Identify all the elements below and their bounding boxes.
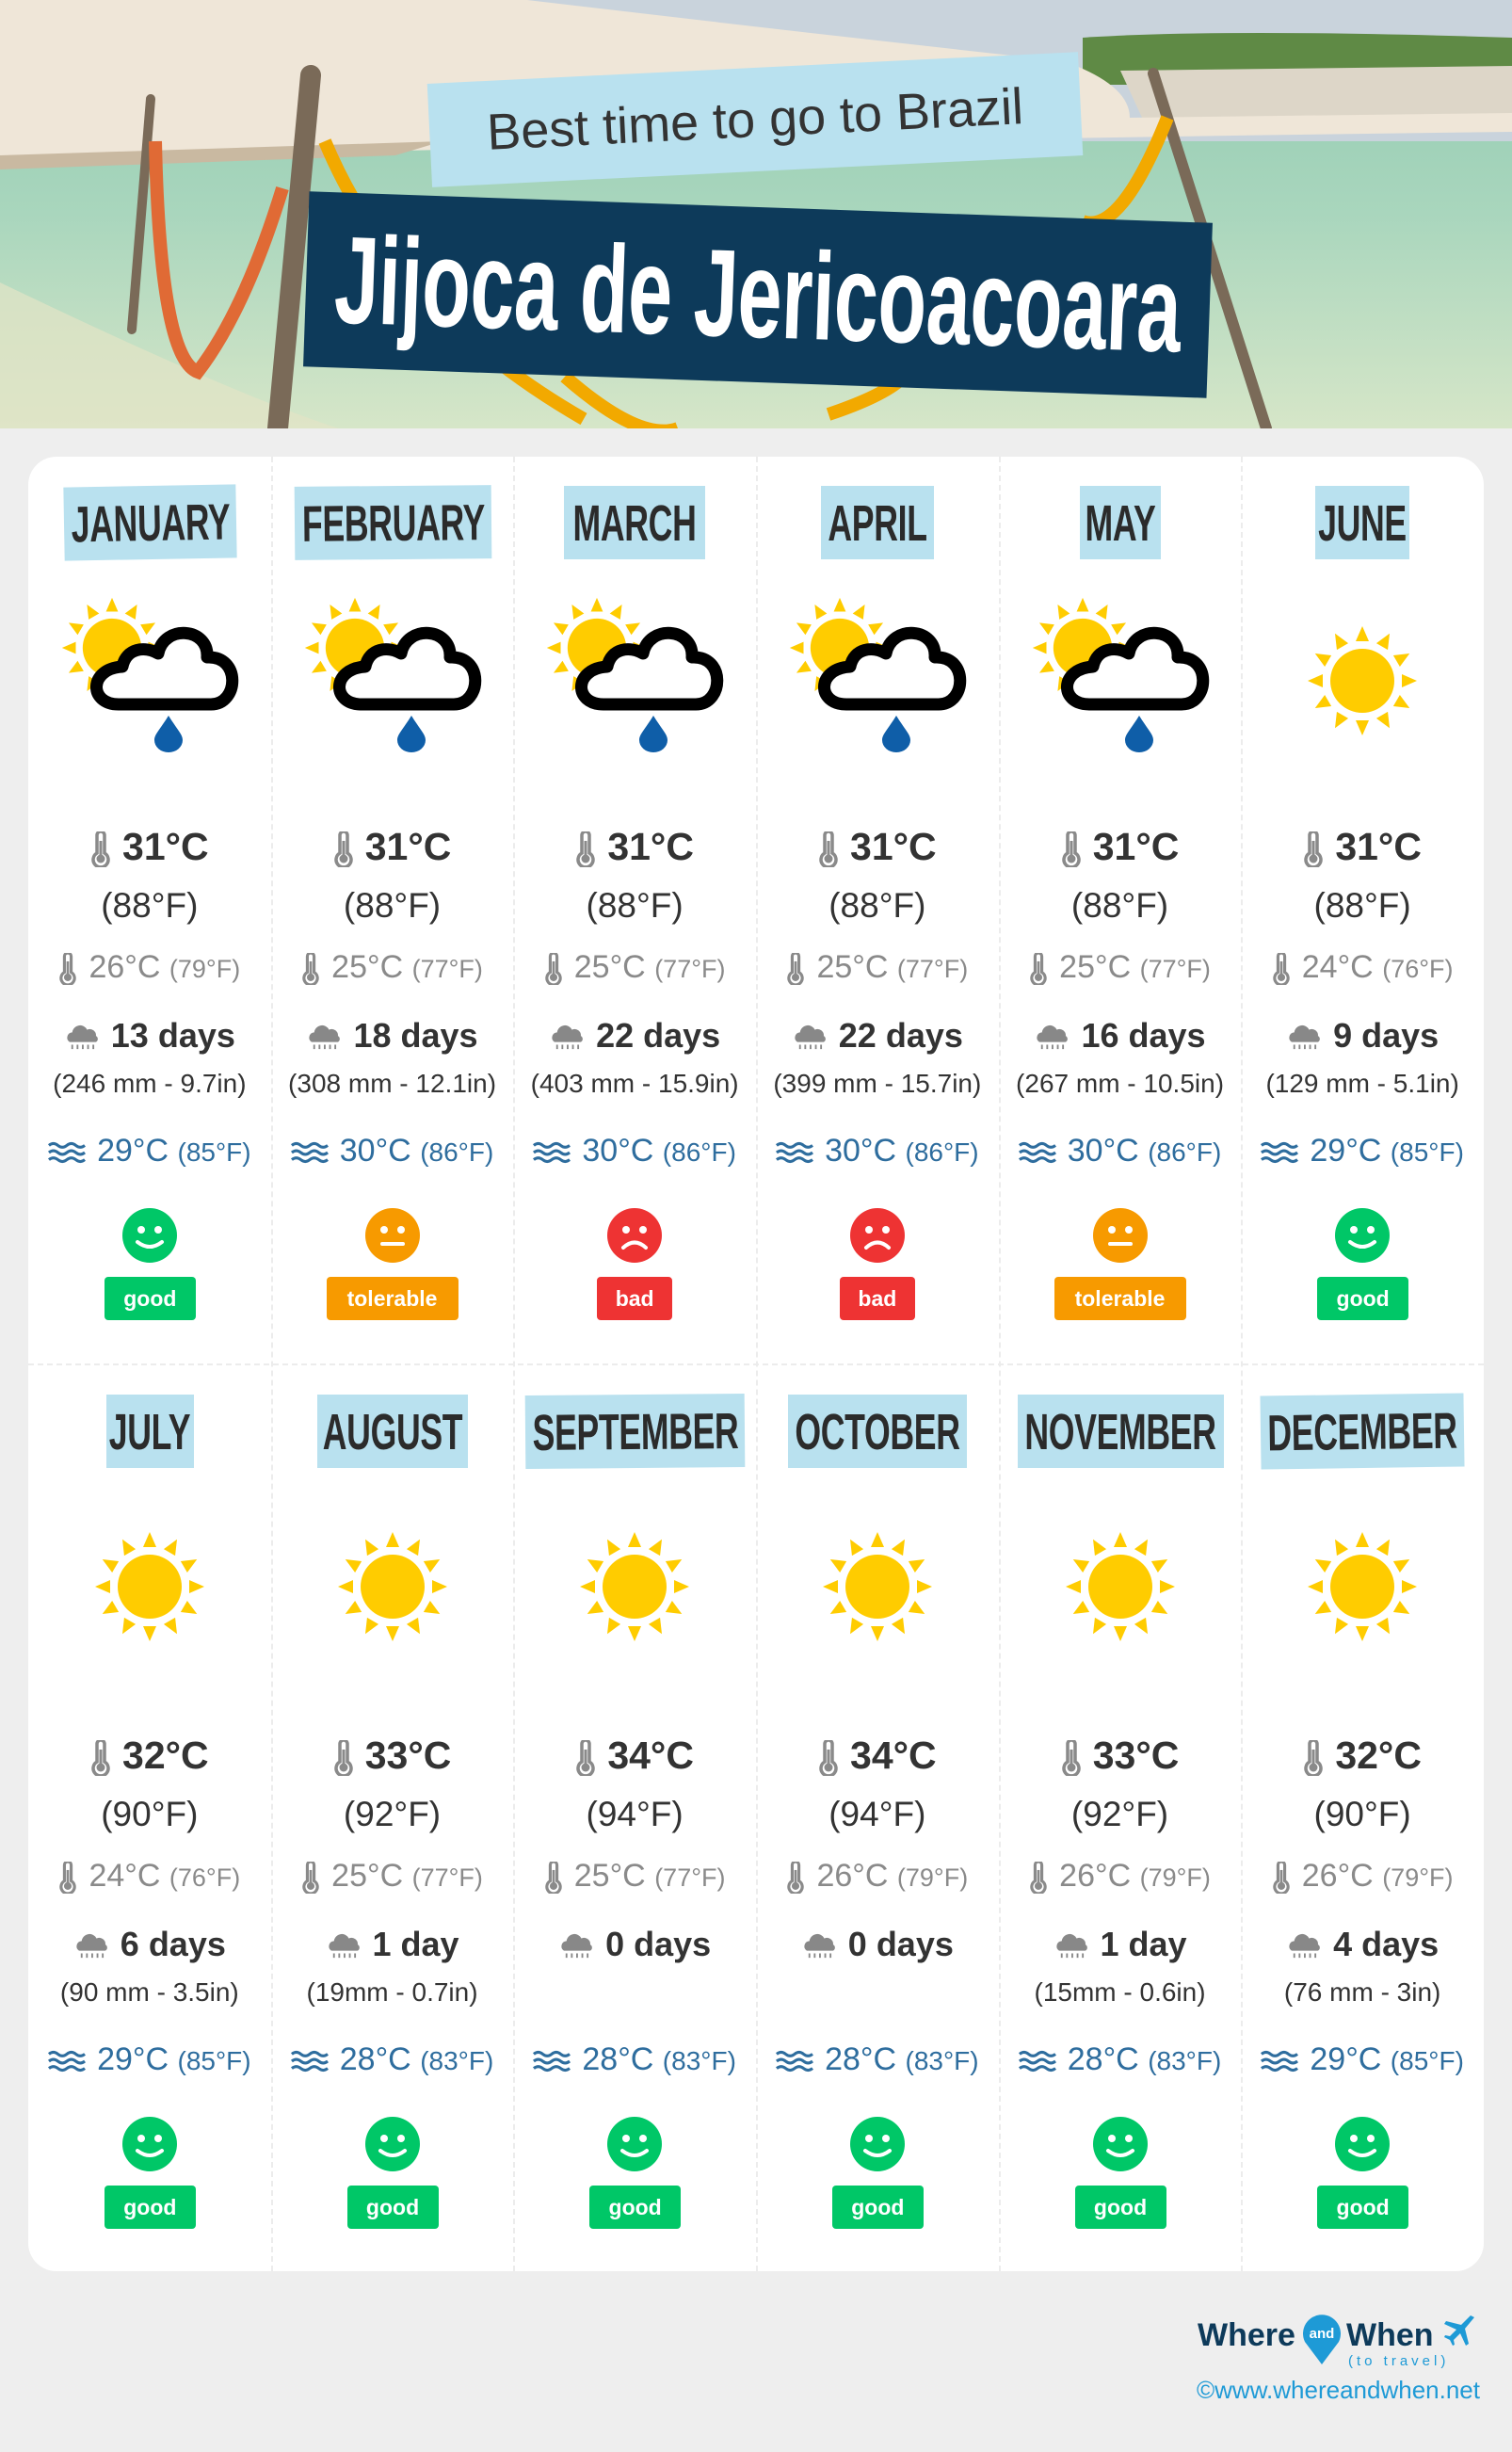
column: May: MAY: [1085, 495, 1155, 552]
column: August: 28°C (83°F): [340, 2041, 493, 2077]
column: May: 25°C (77°F): [1059, 949, 1211, 985]
column: July: (90°F): [101, 1795, 198, 1833]
column: October: 28°C (83°F): [825, 2041, 979, 2077]
column: February: FEBRUARY: [301, 494, 484, 553]
column: April: [773, 486, 981, 1320]
subtitle: Best time to go to Brazil: [427, 52, 1083, 187]
column: December: (76 mm - 3in): [1284, 1977, 1440, 2007]
column: May: 31°C: [1093, 825, 1179, 868]
column: March: 31°C: [607, 825, 694, 868]
column: March: (88°F): [587, 886, 684, 925]
column: July: 32°C: [122, 1734, 209, 1777]
column: February: tolerable: [347, 1286, 437, 1311]
column: October: 0 days: [848, 1925, 954, 1963]
logo: Where and When: (to travel): [1348, 2353, 1449, 2369]
column: September: 28°C (83°F): [582, 2041, 736, 2077]
column: November: 28°C (83°F): [1068, 2041, 1221, 2077]
column: April: (399 mm - 15.7in): [773, 1069, 981, 1098]
column: December: DECEMBER: [1267, 1403, 1457, 1461]
column: March: 30°C (86°F): [582, 1133, 736, 1169]
column: March: 22 days: [596, 1016, 720, 1055]
column: August: good: [366, 2195, 419, 2219]
column: July: 6 days: [121, 1925, 226, 1963]
column: November: (92°F): [1071, 1795, 1168, 1833]
column: August: 25°C (77°F): [331, 1858, 483, 1894]
column: June: JUNE: [1318, 495, 1407, 552]
column: January: 31°C: [122, 825, 209, 868]
column: January: JANUARY: [71, 494, 230, 553]
column: June: 31°C: [1335, 825, 1422, 868]
column: April: 31°C: [850, 825, 937, 868]
column: May: (267 mm - 10.5in): [1016, 1069, 1224, 1098]
icon: airplane: [1444, 2315, 1474, 2346]
column: April: APRIL: [828, 495, 926, 552]
column: June: good: [1337, 1286, 1390, 1311]
column: February: (88°F): [344, 886, 441, 925]
column: March: 25°C (77°F): [574, 949, 725, 985]
column: September: 25°C (77°F): [574, 1858, 725, 1894]
header photo: [0, 0, 1512, 428]
column: June: (129 mm - 5.1in): [1265, 1069, 1459, 1098]
column: November: 33°C: [1093, 1734, 1179, 1777]
column: February: 31°C: [365, 825, 451, 868]
column: August: (92°F): [344, 1795, 441, 1833]
column: May: 30°C (86°F): [1068, 1133, 1221, 1169]
column: September: good: [609, 2195, 662, 2219]
column: June: 24°C (76°F): [1302, 949, 1454, 985]
column: May: [1016, 486, 1224, 1320]
column: December: [1260, 1394, 1465, 2229]
column: August: 1 day: [373, 1925, 459, 1963]
column: November: (15mm - 0.6in): [1034, 1977, 1206, 2007]
column: February: (308 mm - 12.1in): [288, 1069, 496, 1098]
column: July: good: [123, 2195, 176, 2219]
column: April: 30°C (86°F): [825, 1133, 979, 1169]
icon: map pin: [1303, 2315, 1341, 2364]
column: April: (88°F): [828, 886, 925, 925]
column: May: tolerable: [1075, 1286, 1165, 1311]
logo: Where and When: [1198, 2315, 1474, 2369]
column: August: (19mm - 0.7in): [307, 1977, 478, 2007]
column: August: AUGUST: [322, 1404, 462, 1460]
column: November: 1 day: [1100, 1925, 1187, 1963]
icon: map pin: and: [1310, 2326, 1334, 2342]
footer url: ©www.whereandwhen.net: [1197, 2376, 1480, 2404]
column: December: good: [1337, 2195, 1390, 2219]
column: June: 29°C (85°F): [1310, 1133, 1464, 1169]
title: Jijoca de Jericoacoara: Jijoca de Jericoacoara: [332, 210, 1183, 379]
column: July: [48, 1395, 251, 2229]
column: February: 30°C (86°F): [340, 1133, 493, 1169]
column: November: good: [1094, 2195, 1147, 2219]
column: February: 18 days: [353, 1016, 478, 1055]
column: March: MARCH: [573, 495, 697, 552]
column: November: 26°C (79°F): [1059, 1858, 1211, 1894]
column: October: good: [851, 2195, 904, 2219]
column: January: [48, 484, 251, 1320]
column: March: bad: [616, 1286, 654, 1311]
column: December: 29°C (85°F): [1310, 2041, 1464, 2077]
column: August: [291, 1395, 493, 2229]
column: September: SEPTEMBER: [532, 1403, 738, 1461]
column: October: 34°C: [850, 1734, 937, 1777]
column: December: 4 days: [1333, 1925, 1439, 1963]
column: July: (90 mm - 3.5in): [60, 1977, 239, 2007]
column: October: 26°C (79°F): [816, 1858, 968, 1894]
column: January: good: [123, 1286, 176, 1311]
column: November: [1018, 1395, 1224, 2229]
column: January: (246 mm - 9.7in): [53, 1069, 247, 1098]
column: October: [776, 1395, 979, 2229]
column: June: (88°F): [1314, 886, 1411, 925]
column: October: (94°F): [828, 1795, 925, 1833]
column: January: (88°F): [101, 886, 198, 925]
column: January: 29°C (85°F): [97, 1133, 251, 1169]
column: December: 32°C: [1335, 1734, 1422, 1777]
column: August: 33°C: [365, 1734, 451, 1777]
column: March: [531, 486, 739, 1320]
column: April: 22 days: [839, 1016, 963, 1055]
column: December: 26°C (79°F): [1302, 1858, 1454, 1894]
column: January: 13 days: [111, 1016, 235, 1055]
column: September: (94°F): [587, 1795, 684, 1833]
column: October: OCTOBER: [795, 1404, 959, 1460]
column: April: bad: [858, 1286, 896, 1311]
column: January: 26°C (79°F): [88, 949, 240, 985]
column: September: 34°C: [607, 1734, 694, 1777]
column: September: [525, 1394, 746, 2229]
column: April: 25°C (77°F): [816, 949, 968, 985]
column: May: (88°F): [1071, 886, 1168, 925]
column: May: 16 days: [1081, 1016, 1206, 1055]
logo: Where and When: When: [1346, 2317, 1434, 2353]
column: December: (90°F): [1314, 1795, 1411, 1833]
panel: monthly climate card: [28, 457, 1484, 2271]
column: February: [288, 485, 496, 1320]
column: September: 0 days: [605, 1925, 711, 1963]
column: July: JULY: [109, 1404, 191, 1460]
column: February: 25°C (77°F): [331, 949, 483, 985]
column: March: (403 mm - 15.9in): [531, 1069, 739, 1098]
subtitle: Best time to go to Brazil: Best time to go to Brazil: [486, 78, 1024, 161]
column: July: 29°C (85°F): [97, 2041, 251, 2077]
column: June: [1261, 486, 1464, 1320]
logo: Where and When: Where: [1198, 2317, 1295, 2353]
column: June: 9 days: [1333, 1016, 1439, 1055]
column: November: NOVEMBER: [1024, 1404, 1216, 1460]
column: July: 24°C (76°F): [88, 1858, 240, 1894]
